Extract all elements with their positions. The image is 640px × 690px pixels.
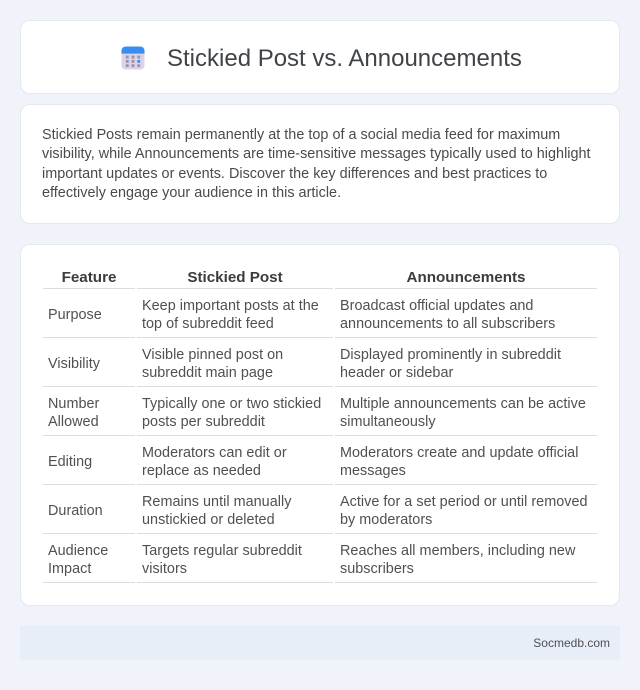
row: Audience Impact bbox=[48, 543, 576, 577]
row: Number Allowed: Allowed bbox=[48, 414, 99, 430]
row: Purpose: Keep important posts at the bbox=[142, 298, 319, 314]
row: Editing: Moderators can edit or bbox=[142, 445, 287, 461]
row: Editing bbox=[48, 445, 578, 479]
row: Duration: Active for a set period or until removed bbox=[340, 494, 588, 510]
panel: title bbox=[20, 20, 620, 94]
table header: Feature bbox=[62, 269, 116, 286]
row: Number Allowed: posts per subreddit bbox=[142, 414, 265, 430]
row: Visibility: Displayed prominently in subreddit bbox=[340, 347, 561, 363]
row: Visibility: Visible pinned post on bbox=[142, 347, 283, 363]
row: Purpose: Purpose bbox=[48, 307, 102, 323]
row: Visibility bbox=[48, 347, 561, 381]
row: Number Allowed: Multiple announcements can be active bbox=[340, 396, 586, 412]
row: Purpose: announcements to all subscribers bbox=[340, 316, 555, 332]
intro paragraph: effectively engage your audience in this article. bbox=[42, 185, 341, 201]
row: Duration: Duration bbox=[48, 503, 103, 519]
footer credit: Socmedb.com bbox=[533, 636, 610, 650]
row: Audience Impact: Targets regular subreddit bbox=[142, 543, 302, 559]
table header bbox=[62, 269, 525, 286]
row: Visibility: header or sidebar bbox=[340, 365, 453, 381]
intro paragraph: visibility, while Announcements are time-sensitive messages typically used to highlight bbox=[42, 146, 591, 162]
panel: intro text bbox=[20, 104, 620, 224]
row: Editing: Moderators create and update official bbox=[340, 445, 578, 461]
intro paragraph: important updates or events. Discover the key differences and best practices to bbox=[42, 166, 547, 182]
row: Editing: Editing bbox=[48, 454, 92, 470]
row: Number Allowed bbox=[48, 396, 586, 430]
row: Visibility: subreddit main page bbox=[142, 365, 273, 381]
row: Number Allowed: simultaneously bbox=[340, 414, 436, 430]
table header: Stickied Post bbox=[187, 269, 283, 286]
icon: calendar bbox=[121, 46, 145, 70]
row: Duration: by moderators bbox=[340, 512, 432, 528]
row: Visibility: Visibility bbox=[48, 356, 100, 372]
row: Duration: unstickied or deleted bbox=[142, 512, 275, 528]
row: Number Allowed: Typically one or two stickied bbox=[142, 396, 321, 412]
row: Audience Impact: visitors bbox=[142, 561, 187, 577]
row: Purpose: top of subreddit feed bbox=[142, 316, 274, 332]
row: Editing: replace as needed bbox=[142, 463, 261, 479]
row: Audience Impact: Audience bbox=[48, 543, 108, 559]
row: Number Allowed: Number bbox=[48, 396, 99, 412]
row: Audience Impact: Reaches all members, including new bbox=[340, 543, 575, 559]
footer bbox=[20, 626, 620, 660]
intro paragraph: Stickied Posts remain permanently at the top of a social media feed for maximum bbox=[42, 126, 560, 142]
row: Editing: messages bbox=[340, 463, 406, 479]
table header: Announcements bbox=[406, 269, 525, 286]
row: Purpose: Broadcast official updates and bbox=[340, 298, 533, 314]
row: Purpose bbox=[48, 298, 555, 332]
row: Duration bbox=[48, 494, 588, 528]
row: Audience Impact: Impact bbox=[48, 561, 91, 577]
row: Audience Impact: subscribers bbox=[340, 561, 414, 577]
row: Duration: Remains until manually bbox=[142, 494, 291, 510]
panel: comparison table bbox=[20, 244, 620, 606]
heading: Stickied Post vs. Announcements bbox=[167, 45, 522, 72]
intro paragraph bbox=[42, 126, 591, 201]
